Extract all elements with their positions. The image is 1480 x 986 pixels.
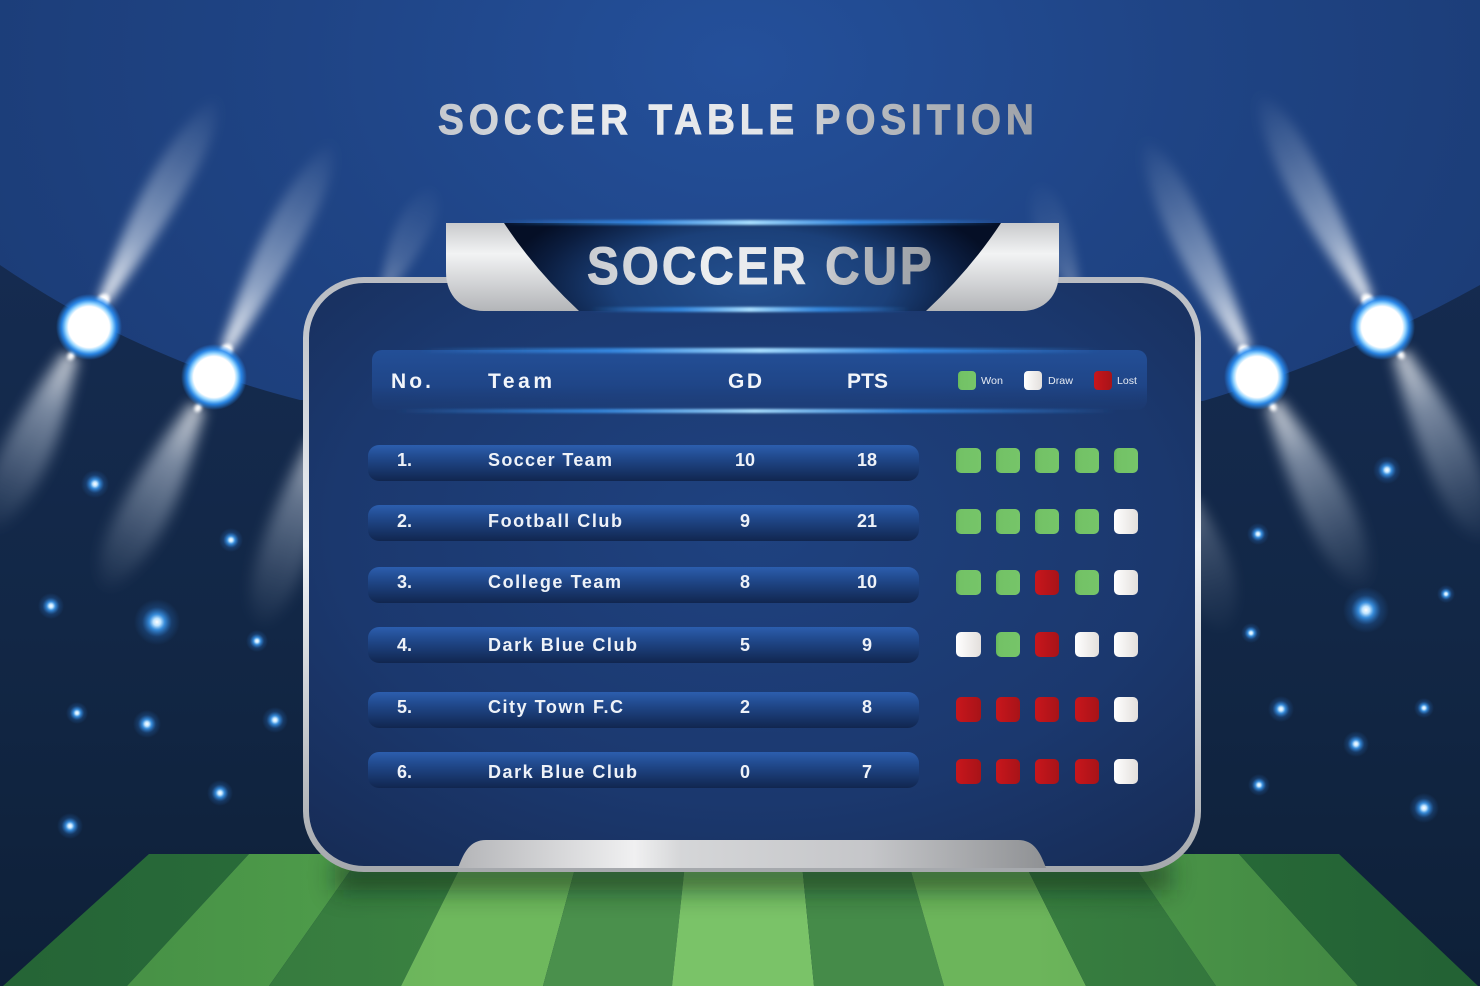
- row 4: [368, 627, 1138, 663]
- row 6: Dark Blue Club: [488, 762, 637, 782]
- legend: [958, 371, 1137, 390]
- dark stadium stand: [0, 265, 1480, 986]
- row 1: Soccer Team: [488, 450, 612, 470]
- table header: No.: [391, 370, 431, 393]
- row 3: 10: [857, 572, 877, 592]
- floodlights: [56, 291, 1415, 414]
- legend: Lost: [1117, 375, 1137, 387]
- main title: SOCCER TABLE POSITION: [438, 95, 1034, 143]
- row 4: Dark Blue Club: [488, 635, 637, 655]
- row 6: [368, 752, 1138, 788]
- row 6: 6.: [397, 762, 412, 782]
- row 5: [368, 692, 1138, 728]
- row 2: 2.: [397, 511, 412, 531]
- row 5: 8: [862, 697, 872, 717]
- top badge: [446, 220, 1059, 312]
- sparkle lights: [38, 456, 1455, 839]
- legend: Draw: [1048, 375, 1073, 387]
- glow line bottom: [590, 307, 910, 312]
- light beams over the sky: [87, 84, 1384, 358]
- row 5: City Town F.C: [488, 697, 623, 717]
- row 1: 1.: [397, 450, 412, 470]
- table header: GD: [728, 370, 762, 393]
- soccer field: [3, 854, 1478, 986]
- row 3: 8: [740, 572, 750, 592]
- legend: Won: [981, 375, 1003, 387]
- badge title: SOCCER CUP: [587, 236, 932, 296]
- row 1: 10: [735, 450, 755, 470]
- glow line top: [500, 220, 1000, 225]
- row 1: 18: [857, 450, 877, 470]
- table header: Team: [488, 370, 552, 393]
- row 5: 5.: [397, 697, 412, 717]
- row 4: 4.: [397, 635, 412, 655]
- row 5: 2: [740, 697, 750, 717]
- row 1: [368, 445, 1138, 481]
- row 4: 9: [862, 635, 872, 655]
- row 4: 5: [740, 635, 750, 655]
- dark ribbon: [504, 223, 1001, 311]
- silver tab: [446, 223, 1059, 311]
- scoreboard panel: [306, 280, 1198, 869]
- table header: [372, 348, 1147, 413]
- row 6: 7: [862, 762, 872, 782]
- bottom silver base: [458, 840, 1046, 868]
- row 2: [368, 505, 1138, 541]
- light beams over the stand: [0, 343, 1480, 642]
- row 6: 0: [740, 762, 750, 782]
- table header: PTS: [847, 370, 888, 393]
- row 3: [368, 567, 1138, 603]
- row 2: 9: [740, 511, 750, 531]
- row 3: College Team: [488, 572, 621, 592]
- row 2: 21: [857, 511, 877, 531]
- row 2: Football Club: [488, 511, 622, 531]
- row 3: 3.: [397, 572, 412, 592]
